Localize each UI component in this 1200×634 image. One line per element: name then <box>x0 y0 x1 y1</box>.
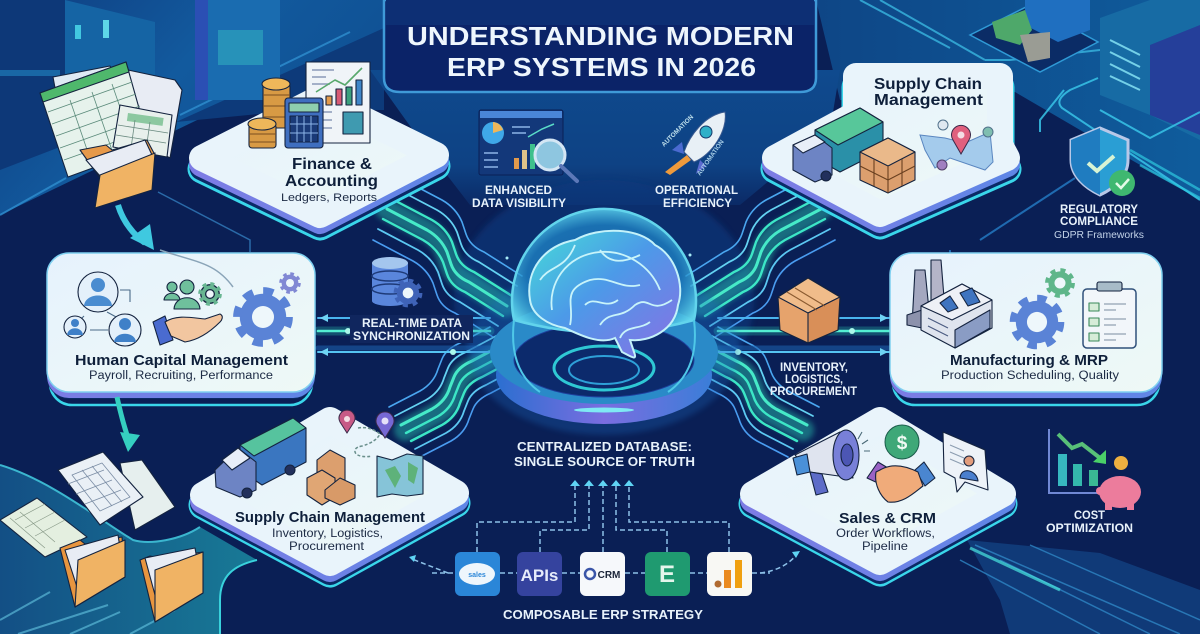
heading: Supply Chain Management <box>874 76 984 109</box>
label: centralized database: SINGLE SOURCE OF TRUTH <box>514 454 695 469</box>
label: centralized database <box>514 439 695 469</box>
title panel: UNDERSTANDING MODERN <box>407 23 794 51</box>
icon: dollar bubble: $ <box>897 433 908 454</box>
horizontal data lines right <box>718 314 890 356</box>
label: inventory logistics procurement: INVENTORY, <box>780 362 848 374</box>
label: real-time data synchronization: SYNCHRONIZATION <box>353 331 470 343</box>
label: real-time data synchronization: REAL-TIME DATA <box>362 318 462 330</box>
flow lines: right bottom <box>687 327 819 457</box>
icon: cardboard box <box>778 278 840 343</box>
icon: truck <box>215 418 306 498</box>
heading: Finance and Accounting: Ledgers, Reports <box>281 192 378 204</box>
horizontal data lines left <box>318 314 490 356</box>
icon: handshake <box>867 462 935 502</box>
icon: people network <box>64 272 141 346</box>
composable integrations: Salesforce tile: sales <box>468 572 486 579</box>
heading: Supply Chain Management: Supply Chain <box>874 76 982 93</box>
icon: automation rocket <box>660 112 726 177</box>
icon: database sync <box>372 257 420 306</box>
heading: Sales and CRM: Order Workflows, <box>836 528 935 540</box>
label: operational efficiency <box>655 185 738 210</box>
arrows into central database <box>409 480 800 562</box>
top-left server buildings <box>0 0 280 170</box>
label: operational efficiency: OPERATIONAL <box>655 185 738 197</box>
label: inventory logistics procurement <box>770 362 857 398</box>
icon: team in hand <box>153 280 222 345</box>
heading: Manufacturing and MRP <box>941 352 1119 382</box>
composable integrations: APIs tile: APIs <box>521 566 558 585</box>
composable integrations: Salesforce tile <box>455 552 500 596</box>
heading: Manufacturing and MRP: Production Scheduling, Quality <box>941 370 1119 382</box>
icon: factory <box>907 260 992 348</box>
icon: calculator <box>285 98 323 148</box>
label: inventory logistics procurement: PROCUREMENT <box>770 386 857 398</box>
icon: automation rocket: AUTOMATION <box>696 138 726 177</box>
icon: boxes <box>307 450 355 505</box>
composable integrations: spreadsheet tile: E <box>659 561 675 588</box>
label: composable ERP strategy: COMPOSABLE ERP STRATEGY <box>503 607 703 622</box>
label: regulatory compliance: GDPR Frameworks <box>1054 229 1144 241</box>
label: inventory logistics procurement: LOGISTICS, <box>785 374 843 386</box>
title panel: ERP SYSTEMS IN 2026 <box>447 54 756 82</box>
icon: profile card <box>943 432 988 492</box>
flow lines: right top <box>686 179 835 337</box>
icon: checklist <box>1083 282 1136 348</box>
icon: dollar bubble <box>885 425 919 459</box>
icon: analytics dashboard <box>479 110 577 181</box>
heading: Supply Chain Management: Inventory, Logistics, <box>272 528 383 540</box>
icon: bottom-left documents and folders <box>0 452 203 622</box>
icon: small gear <box>281 274 299 292</box>
heading: Finance and Accounting <box>281 156 378 204</box>
label: enhanced data visibility: ENHANCED <box>485 185 552 197</box>
icon: top-left documents and folder <box>40 62 182 208</box>
icon: automation rocket: AUTOMATION <box>660 114 695 148</box>
label: centralized database: CENTRALIZED DATABASE: <box>517 439 692 454</box>
heading: Sales and CRM: Pipeline <box>862 541 908 553</box>
panel: Supply Chain Management top <box>775 76 1007 225</box>
panel: Sales and CRM <box>753 420 1003 572</box>
flow lines: left bottom <box>389 327 521 457</box>
icon: route map <box>920 120 993 170</box>
label: operational efficiency: EFFICIENCY <box>663 198 732 210</box>
heading: Human Capital Management: Human Capital Management <box>75 352 288 369</box>
label: real-time data synchronization <box>350 315 473 343</box>
panel: Supply Chain Management bottom <box>203 410 456 573</box>
title panel <box>384 0 816 92</box>
icon: route pins <box>339 410 394 457</box>
heading: Supply Chain Management: Supply Chain Management <box>235 509 425 526</box>
icon: coins <box>248 78 290 148</box>
label: regulatory compliance <box>1054 204 1144 241</box>
heading: Finance and Accounting: Finance & <box>292 156 372 173</box>
icon: megaphone <box>793 430 870 495</box>
heading: Manufacturing and MRP: Manufacturing & MRP <box>950 352 1108 369</box>
icon: compliance shield <box>1071 128 1135 196</box>
heading: Sales and CRM <box>836 510 936 553</box>
panel: Finance and Accounting <box>202 62 436 226</box>
composable integrations: spreadsheet tile <box>645 552 690 596</box>
composable integrations: APIs tile <box>517 552 562 596</box>
label: cost optimization: COST <box>1074 510 1105 522</box>
arrow: HCM to bottom documents <box>117 397 140 452</box>
top-right server buildings <box>860 0 1200 258</box>
arrow: folder to HCM <box>118 192 250 287</box>
heading: Supply Chain Management <box>235 509 425 553</box>
flow lines: left top <box>373 179 522 337</box>
label: cost optimization <box>1046 510 1133 535</box>
icon: map <box>377 454 423 497</box>
brain <box>529 231 680 357</box>
heading: Finance and Accounting: Accounting <box>285 173 378 190</box>
icon: truck <box>793 108 883 182</box>
panel: Human Capital Management <box>47 253 315 405</box>
panel: Manufacturing and MRP <box>890 253 1162 405</box>
heading: Supply Chain Management: Management <box>874 92 984 109</box>
icon: gears <box>1014 270 1073 345</box>
label: regulatory compliance: COMPLIANCE <box>1060 216 1138 228</box>
composable integrations: CRM tile: CRM <box>598 570 620 581</box>
composable integrations: CRM tile <box>580 552 625 596</box>
composable integrations: analytics tile <box>707 552 752 596</box>
icon: cost chart and piggy bank <box>1049 429 1141 510</box>
composable ERP connectors <box>412 484 798 573</box>
heading: Human Capital Management <box>75 352 288 382</box>
label: enhanced data visibility <box>472 185 566 210</box>
central AI brain on dome platform <box>469 209 739 435</box>
icon: boxes <box>860 138 915 193</box>
label: cost optimization: OPTIMIZATION <box>1046 523 1133 535</box>
icon: large gear <box>237 291 289 343</box>
heading: Supply Chain Management: Procurement <box>289 541 365 553</box>
label: regulatory compliance: REGULATORY <box>1060 204 1138 216</box>
heading: Sales and CRM: Sales & CRM <box>839 510 936 527</box>
label: enhanced data visibility: DATA VISIBILITY <box>472 198 566 210</box>
icon: report <box>306 62 370 143</box>
heading: Human Capital Management: Payroll, Recruiting, Performance <box>89 370 273 382</box>
